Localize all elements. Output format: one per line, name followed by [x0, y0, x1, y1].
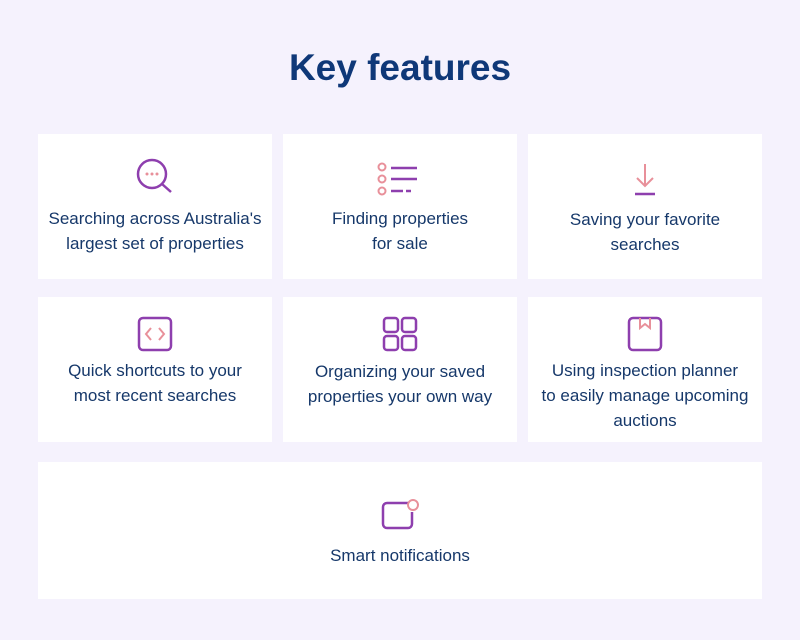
text — [68, 361, 242, 405]
text — [308, 362, 492, 406]
text — [570, 210, 720, 254]
card: finding — [283, 134, 517, 279]
icon: bookmark box — [628, 316, 662, 352]
text: Finding properties — [332, 209, 468, 228]
text: Searching across Australia's — [48, 209, 262, 228]
text: properties your own way — [308, 387, 492, 406]
card: organizing — [283, 297, 517, 442]
icon: download — [635, 164, 655, 196]
text — [48, 209, 262, 253]
title: Key features — [289, 47, 511, 88]
icon: code box — [138, 316, 172, 352]
card: notifications — [38, 462, 762, 599]
text: Saving your favorite — [570, 210, 720, 229]
icon: grid — [382, 316, 418, 352]
text — [332, 209, 468, 253]
text: to easily manage upcoming — [542, 386, 748, 405]
card: searching — [38, 134, 272, 279]
icon: list — [378, 162, 417, 196]
text: most recent searches — [74, 386, 236, 405]
icon: search — [136, 158, 172, 193]
text — [542, 361, 748, 430]
card: inspection — [528, 297, 762, 442]
text: searches — [610, 235, 679, 254]
text: auctions — [613, 411, 677, 430]
card: saving — [528, 134, 762, 279]
text: Quick shortcuts to your — [68, 361, 242, 380]
text: largest set of properties — [66, 234, 244, 253]
icon: notification — [382, 499, 419, 530]
text: Using inspection planner — [552, 361, 738, 380]
text: Organizing your saved — [315, 362, 485, 381]
text: Smart notifications — [330, 546, 470, 565]
card: shortcuts — [38, 297, 272, 442]
text: for sale — [372, 234, 428, 253]
